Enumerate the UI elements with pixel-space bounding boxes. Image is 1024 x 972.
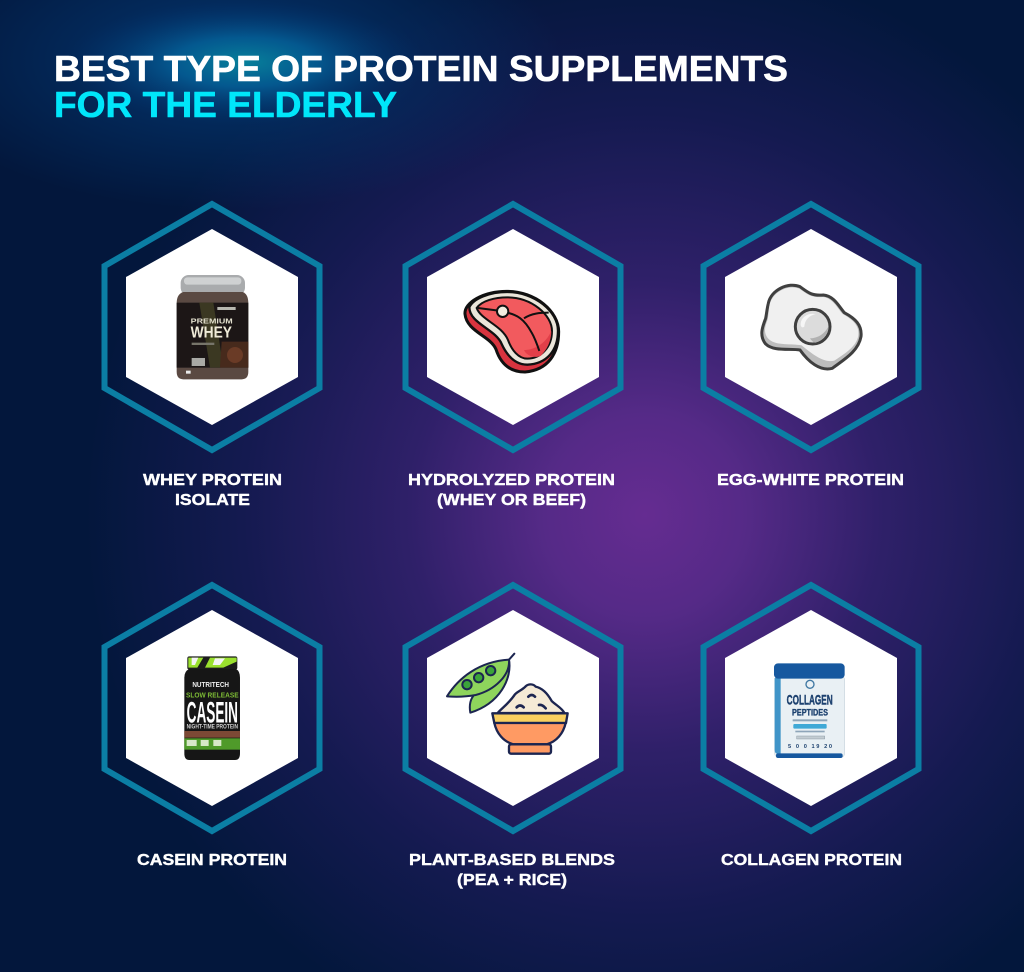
icon: whey protein jar: WHEY — [191, 324, 232, 341]
label: CASEIN PROTEIN — [137, 852, 287, 869]
label — [408, 472, 615, 509]
label: (WHEY OR BEEF) — [437, 492, 586, 509]
icon: whey protein jar: PREMIUM — [191, 317, 233, 326]
icon: whey protein jar — [177, 275, 248, 379]
label — [143, 472, 282, 509]
icon: collagen jar: 5 0 0 19 20 — [788, 744, 832, 750]
panel: casein protein: CASEIN — [187, 696, 238, 729]
hexagon frame — [704, 204, 918, 450]
label — [409, 852, 615, 889]
title: FOR THE ELDERLY — [54, 84, 397, 125]
icon: casein jar — [184, 656, 240, 760]
icon: collagen jar: PEPTIDES — [792, 708, 828, 718]
hexagon frame — [406, 204, 620, 450]
label: PLANT-BASED BLENDS — [409, 852, 615, 869]
title — [54, 48, 788, 125]
hexagon frame — [704, 585, 918, 831]
icon: collagen jar — [774, 663, 845, 758]
panel: casein protein — [104, 585, 320, 869]
panel: collagen protein — [704, 585, 918, 869]
panel: egg-white protein — [704, 204, 918, 489]
icon: casein jar: NIGHT-TIME PROTEIN — [187, 725, 238, 731]
panel: plant-based blends — [406, 585, 620, 889]
hexagon frame — [406, 585, 620, 831]
icon: fried egg — [762, 285, 861, 369]
icon: steak — [465, 291, 559, 372]
label: (PEA + RICE) — [457, 872, 567, 889]
hexagon frame — [104, 204, 320, 450]
label: ISOLATE — [175, 492, 250, 509]
label: EGG-WHITE PROTEIN — [717, 472, 904, 489]
label: WHEY PROTEIN — [143, 472, 282, 489]
icon: casein jar: NUTRITECH — [192, 680, 229, 689]
panel: hydrolyzed protein — [406, 204, 620, 509]
icon: pea pod and rice bowl — [447, 654, 568, 754]
icon: collagen jar: COLLAGEN — [787, 692, 833, 708]
label: HYDROLYZED PROTEIN — [408, 472, 615, 489]
hexagon frame — [104, 585, 320, 831]
panel: whey protein isolate — [104, 204, 320, 509]
label: COLLAGEN PROTEIN — [721, 852, 902, 869]
icon: casein jar: SLOW RELEASE — [186, 690, 239, 699]
title: BEST TYPE OF PROTEIN SUPPLEMENTS — [54, 48, 788, 89]
